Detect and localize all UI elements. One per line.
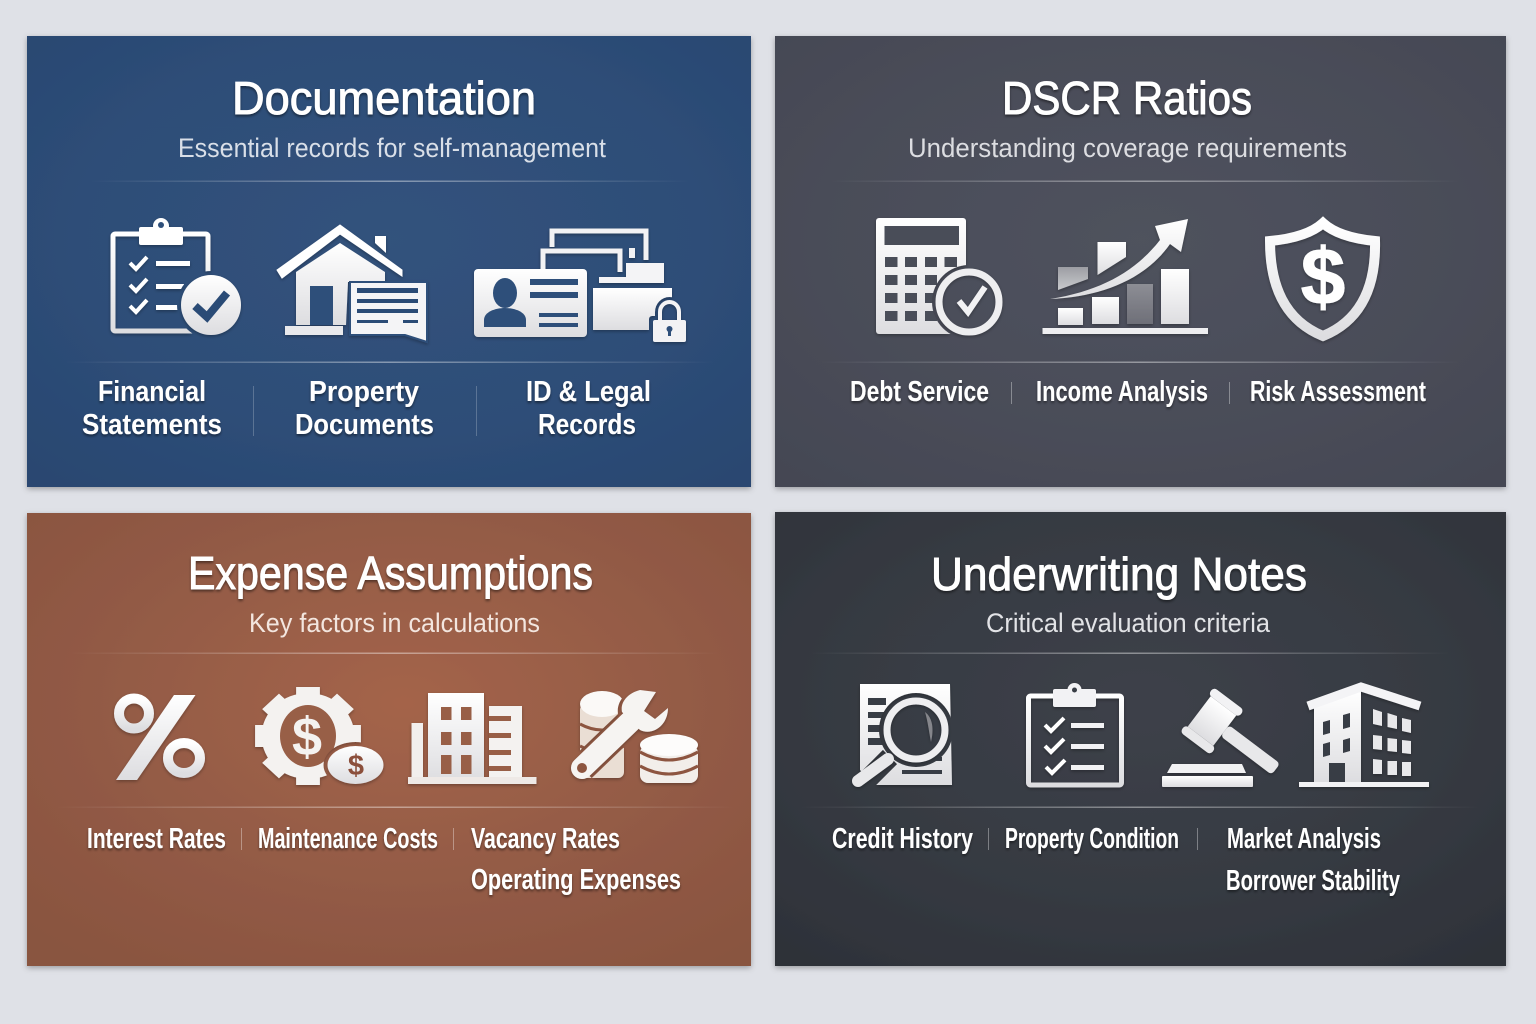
subheading: underwriting notes: Critical evaluation criteria <box>986 608 1271 638</box>
heading: expense assumptions: Expense Assumptions <box>188 547 593 599</box>
label: property documents: Property <box>309 376 419 408</box>
label: financial statements <box>82 376 222 441</box>
subheading: expense assumptions: Key factors in calculations <box>249 608 540 638</box>
icon: id card and locked folders <box>474 231 686 342</box>
heading: documentation: Documentation <box>232 72 536 124</box>
icon: gear with dollar coins: $ <box>292 707 322 767</box>
label: debt service: Debt Service <box>850 376 989 408</box>
icon: house with document <box>277 225 427 342</box>
label: property documents: Documents <box>295 409 434 441</box>
subheading: dscr ratios: Understanding coverage requirements <box>908 133 1347 163</box>
heading: underwriting notes: Underwriting Notes <box>931 548 1307 600</box>
label: maintenance costs: Maintenance Costs <box>258 823 438 855</box>
icon: gear with dollar coins: $ <box>348 750 364 782</box>
icon: shield with dollar <box>1270 223 1375 336</box>
icon: calculator with check <box>876 218 999 334</box>
label: interest rates: Interest Rates <box>87 823 226 855</box>
label: operating expenses: Operating Expenses <box>471 864 681 896</box>
icon: rising bar chart with arrow <box>1042 219 1208 334</box>
icon: shield with dollar: $ <box>1301 232 1345 321</box>
heading: dscr ratios: DSCR Ratios <box>1002 72 1252 124</box>
icon: gavel <box>1162 687 1293 792</box>
label: borrower stability: Borrower Stability <box>1226 865 1400 897</box>
icon: wrench and coin stacks <box>577 690 698 783</box>
icon: apartment building <box>1299 687 1429 787</box>
icon: clipboard with check badge <box>113 218 241 335</box>
icon: checklist clipboard <box>1028 683 1122 785</box>
label: vacancy rates: Vacancy Rates <box>471 823 620 855</box>
label: risk assessment: Risk Assessment <box>1250 376 1426 408</box>
panel: expense assumptions <box>27 513 751 966</box>
label: financial statements: Financial <box>98 376 206 408</box>
subheading: documentation: Essential records for self-management <box>178 133 606 163</box>
label: id and legal records: Records <box>538 409 636 441</box>
label: income analysis: Income Analysis <box>1036 376 1208 408</box>
icon: document with magnifier <box>858 684 952 785</box>
icon: gear with dollar coins <box>255 687 384 785</box>
panel: dscr ratios <box>775 36 1506 487</box>
label: financial statements: Statements <box>82 409 222 441</box>
icon: percent sign <box>116 695 200 780</box>
label: property documents <box>295 376 434 441</box>
label: market analysis: Market Analysis <box>1227 823 1381 855</box>
label: id and legal records <box>526 376 651 441</box>
panel: underwriting notes <box>775 512 1506 966</box>
label: id and legal records: ID & Legal <box>526 376 651 408</box>
panel: documentation <box>27 36 751 487</box>
label: credit history: Credit History <box>832 823 973 855</box>
label: property condition: Property Condition <box>1005 823 1179 855</box>
icon: office buildings <box>408 693 536 784</box>
